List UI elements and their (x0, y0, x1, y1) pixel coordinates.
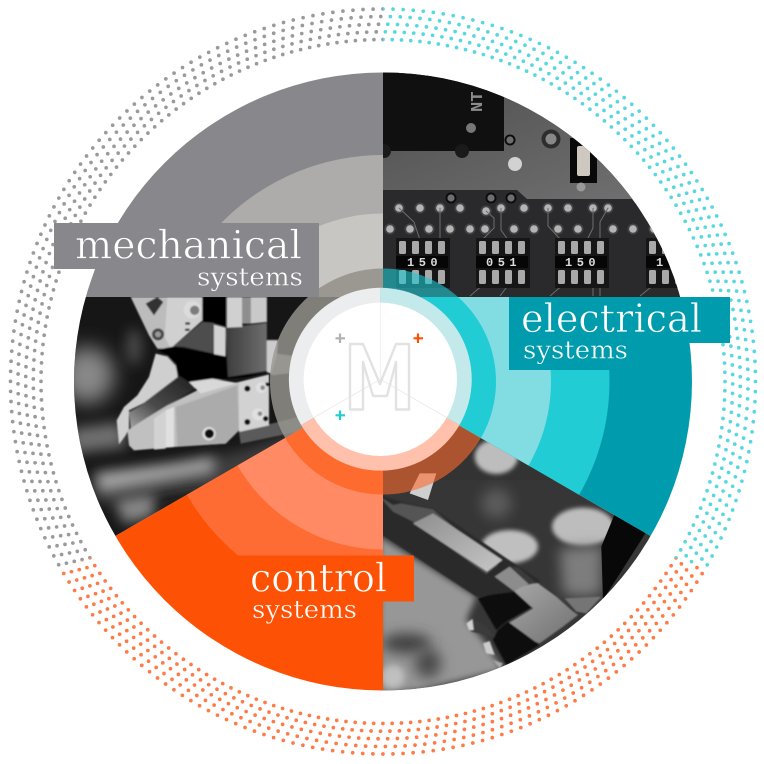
photo: circuit board: NT (469, 92, 488, 112)
background right of column (266, 297, 278, 341)
blurred floor (380, 537, 503, 693)
subheading: systems: systems (197, 262, 303, 292)
gripper upper finger (117, 354, 178, 444)
dotted ring: grey mechanical arc (8, 7, 383, 567)
bokeh lights (481, 530, 538, 563)
label: electrical systems (509, 297, 730, 370)
plus icon: orange (414, 334, 423, 343)
subheading: systems: systems (252, 595, 357, 624)
subheading: systems: systems (523, 336, 628, 364)
label: control systems (237, 556, 414, 625)
heading: mechanical: mechanical (75, 224, 302, 268)
chip marking 051: 051 (486, 256, 521, 270)
capacitor (570, 138, 597, 183)
chip on circuit board (383, 70, 504, 151)
translucent ring over meter photo (383, 426, 481, 494)
meter body (383, 496, 539, 598)
hub ring: mechanical segment (289, 288, 380, 425)
translucent ring over circuit photo (383, 268, 458, 297)
photo: handheld meter (383, 426, 650, 690)
plus icon: cyan (336, 410, 345, 420)
photo: gripper (74, 297, 380, 536)
gripper column (202, 297, 226, 327)
translucent ring over gripper photo (270, 297, 380, 438)
hub ring: electrical segment (380, 288, 472, 425)
dotted ring: orange control arc (62, 558, 704, 756)
central hub (289, 288, 472, 471)
gripper lower arm (127, 382, 239, 450)
shadow under column (157, 346, 267, 382)
hub ring: control segment (301, 379, 460, 471)
hub white centre (304, 303, 457, 456)
chip marking 150: 150 (407, 256, 442, 270)
logo M outline (350, 344, 409, 410)
hand on meter (508, 583, 578, 643)
chip marking 150 second: 150 (565, 256, 600, 270)
gripper upper block (131, 297, 202, 349)
main circular disc (61, 70, 703, 700)
heading: electrical: electrical (521, 297, 702, 342)
chip marking fourth: 1 (656, 256, 668, 270)
sector: mechanical systems rings (86, 72, 383, 297)
sector: control systems rings (116, 428, 383, 690)
heading: control: control (250, 556, 387, 602)
label: mechanical systems (54, 223, 319, 297)
plus icon: grey (336, 334, 345, 343)
photo: circuit board (383, 72, 680, 297)
sector: electrical systems rings (420, 297, 692, 536)
dotted ring: cyan electrical arc (383, 7, 758, 567)
